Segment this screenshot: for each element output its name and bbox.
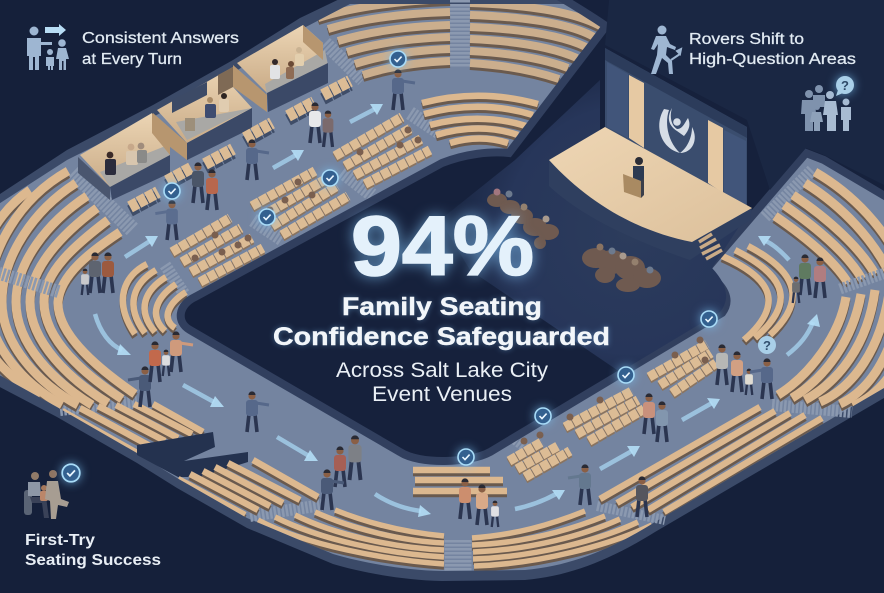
audience cluster lower [582,244,661,292]
stage base [549,160,752,260]
seating: inner top tiers [422,96,538,143]
small seat rows [130,81,350,207]
logo [659,108,695,153]
icon: walking rover [651,26,681,74]
heading: first-try seating success [25,532,161,569]
icon: seated family [24,470,69,519]
seating: bottom arc tiers left [258,510,444,564]
seating: small left crescent tiers [123,264,186,334]
dark partition block [137,432,248,477]
subtitle [336,359,549,406]
seat block D [509,442,570,477]
seating: top balcony tiers right [470,3,602,79]
flow arrows [95,104,820,517]
lectern with speaker [623,157,644,198]
arrow 7 [375,494,431,517]
right curtain [724,130,746,205]
seating: lower-right straight tiers [600,407,834,514]
seat block A [172,218,263,282]
left curtain [607,62,628,138]
big stat: 94% [351,199,534,293]
tan panel left [629,75,644,148]
question bubble on walkway [758,336,776,354]
seating: small right crescent tiers [722,246,793,340]
stage steps [699,234,722,259]
heading: rovers shift: Rovers Shift to [689,31,804,48]
stair gap across left tiers [0,272,60,292]
arrow 1 [125,236,158,257]
seating: lower-centre tiers [178,460,318,515]
heading: consistent answers: at Every Turn [82,51,182,68]
arrow 4 [95,314,131,355]
seat block E [565,391,644,441]
stage floor [549,127,752,242]
title: Family Seating [342,293,542,321]
seating: bottom arc tiers right [472,511,652,566]
arrow 11 [787,314,820,355]
stage [549,48,752,260]
seating: lower-left straight tiers [62,404,203,453]
seating: left arc tiers [0,171,135,405]
arrow 6 [277,437,318,461]
heading: consistent answers [82,30,239,68]
bench tiers bottom centre [413,470,507,491]
arrow 12 [758,236,789,260]
arrow 8 [515,490,565,509]
arrow 5 [183,385,224,407]
audience cluster upper [487,188,559,249]
viewing box left [78,113,170,200]
heading: rovers shift: High-Question Areas [689,51,856,68]
arrow 10 [682,398,720,420]
arrow 2 [273,150,304,168]
heading: first-try seating success: First-Try [25,532,95,549]
valance [605,48,747,138]
seat block B [252,171,348,235]
subtitle: Across Salt Lake City [336,359,549,382]
seating: top balcony tiers left [318,0,450,75]
tan panel right [708,120,723,193]
seat block C [335,117,430,184]
title: Confidence Safeguarded [273,323,610,351]
icon: question bubble: ? [841,78,849,93]
title [273,293,610,351]
heading: first-try seating success: Seating Success [25,552,161,569]
heading: consistent answers: Consistent Answers [82,30,239,47]
stage zone and central hole [181,0,884,461]
arrow 9 [600,446,640,469]
arrow 3 [350,104,383,122]
icon: rover guiding family [27,24,69,70]
seat block F [649,344,716,393]
icon: question bubble [836,76,854,96]
subtitle: Event Venues [372,383,512,406]
stair gap across right tiers [840,272,884,289]
guests and rovers [81,69,826,527]
checkmark badges [164,51,717,465]
viewing box centre [152,67,252,160]
question bubble on walkway: ? [763,338,771,353]
seated guests [192,126,708,444]
viewing box right [233,25,328,112]
seating: right arc tiers [775,172,884,406]
backdrop [605,48,747,207]
icon: check badge [62,464,80,482]
icon: family with question [801,85,851,131]
heading: rovers shift [689,31,856,68]
